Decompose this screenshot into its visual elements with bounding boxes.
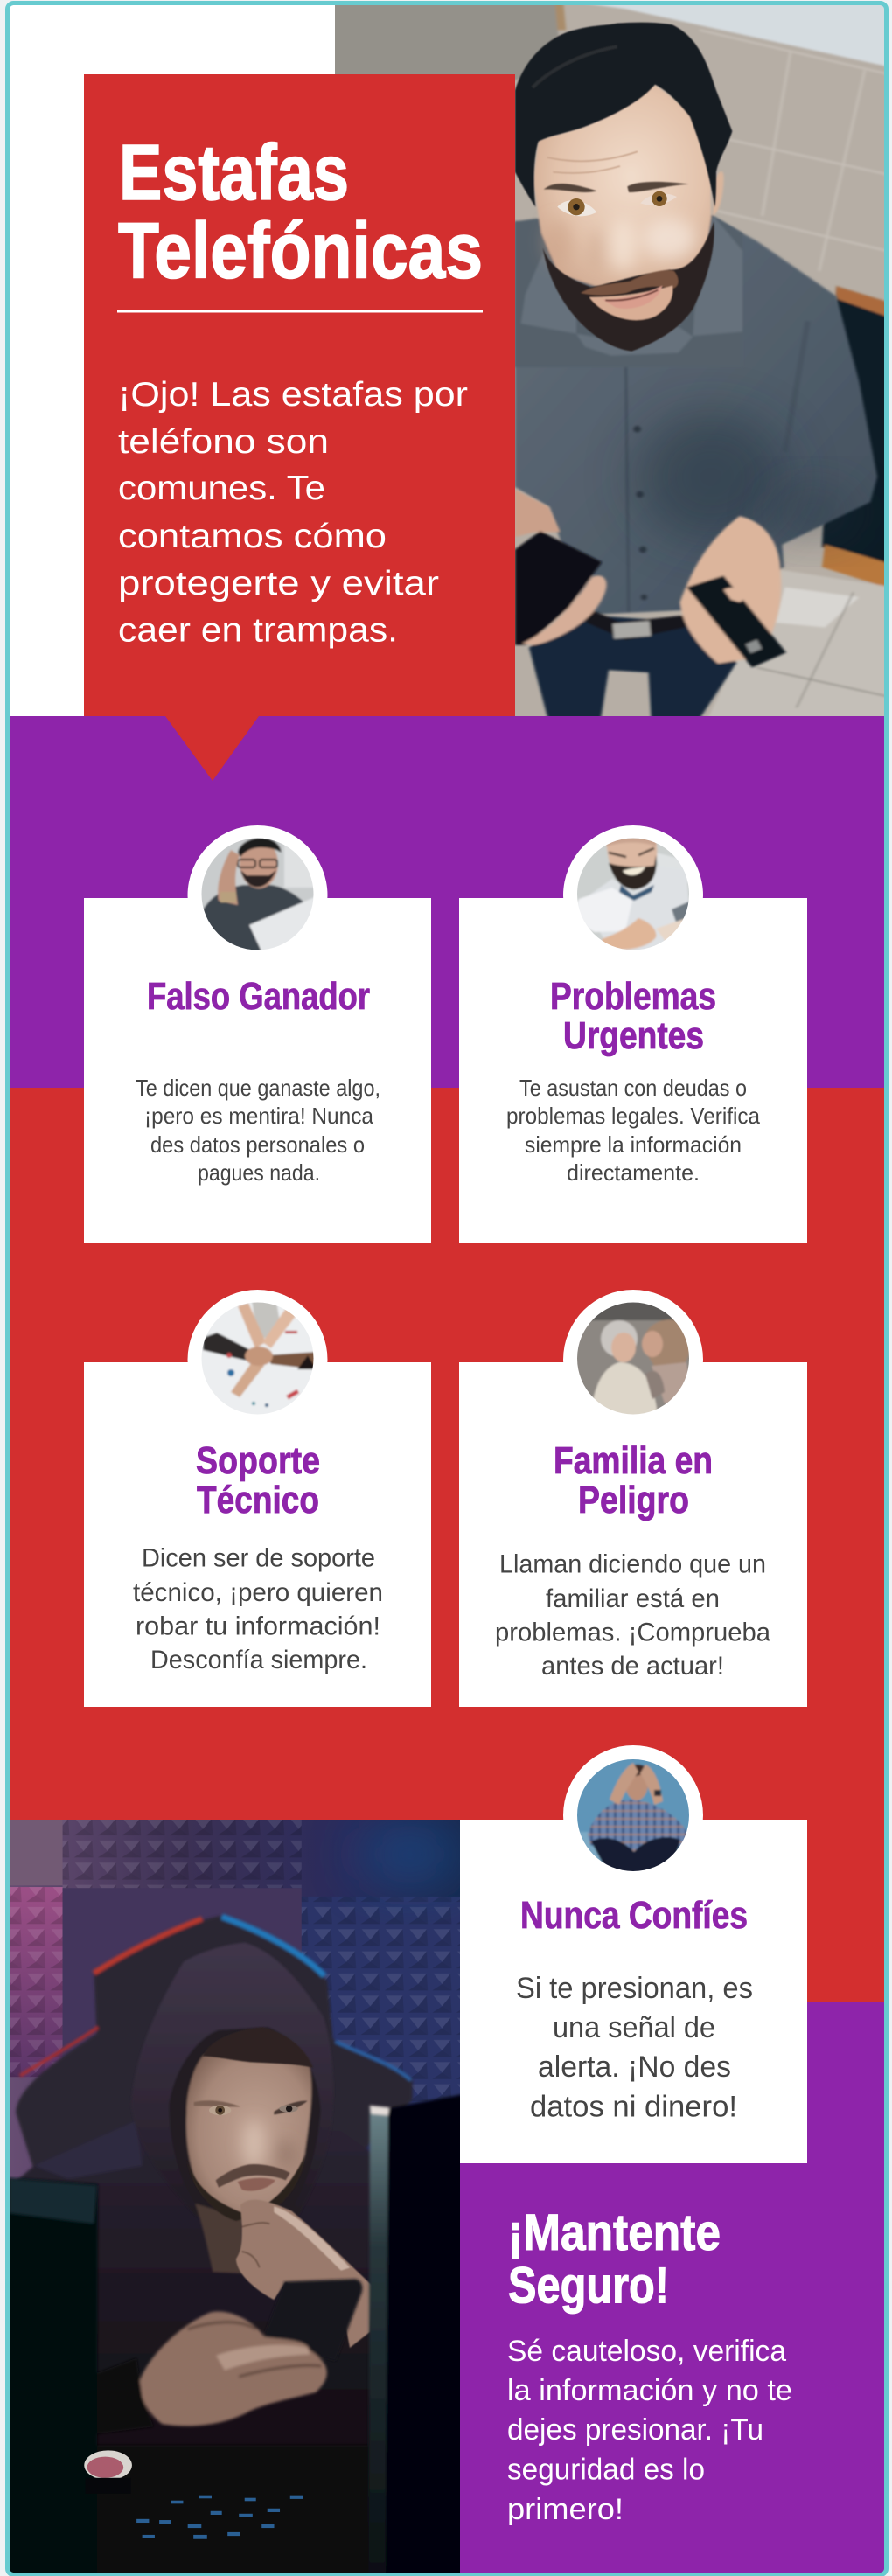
hood, face and hand [131,1943,372,2348]
card [686,575,786,667]
body text: Te dicen que ganaste algo, [136,1075,380,1101]
body text: problemas. ¡Comprueba [495,1618,770,1647]
body text: robar tu información! [136,1612,380,1640]
panel: closing message [507,2204,792,2526]
photo: worried man holding phone and card [330,0,892,723]
ear [713,171,724,216]
heading: Nunca Confíes [520,1894,748,1937]
card: Problemas Urgentes [459,825,807,1243]
beard [543,221,714,352]
body text: Sé cauteloso, verifica [507,2335,786,2368]
body text: Dicen ser de soporte [142,1544,375,1572]
hair [515,23,732,207]
heading [550,975,716,1057]
body text [495,1549,770,1681]
chin hand [236,2200,372,2348]
body text: primero! [507,2493,624,2526]
body text: alerta. ¡No des [538,2050,731,2084]
card: Soporte Técnico [84,1290,431,1707]
card: Familia en Peligro [459,1290,807,1707]
intro text: teléfono son [118,423,329,461]
body text: una señal de [553,2011,715,2044]
body text: Llaman diciendo que un [499,1549,766,1579]
beard [186,2157,304,2221]
shirt [515,216,877,615]
body text: directamente. [567,1159,700,1186]
body text: dejes presionar. ¡Tu [507,2413,763,2447]
icon: elderly woman and relative [575,1301,693,1419]
body text: familiar está en [546,1584,720,1613]
eyes [557,200,596,216]
body text: problemas legales. Verifica [506,1103,761,1129]
heading: Soporte [196,1439,320,1482]
icon: man reading paper [201,838,313,950]
body text: Desconfía siempre. [150,1646,367,1674]
heading: Peligro [578,1479,689,1521]
belt [586,610,686,640]
heading: Familia en [554,1439,713,1482]
body text [506,1075,761,1186]
panel: title [84,74,515,781]
purple band [10,716,884,1088]
title: Telefónicas [118,208,483,296]
man head [515,23,742,367]
heading [196,1446,320,1514]
face [186,2052,311,2215]
skin [533,85,711,289]
body text: datos ni dinero! [530,2090,737,2123]
heading [554,1439,713,1521]
card: Nunca Confíes [460,1745,807,2163]
card: Falso Ganador [84,825,431,1243]
red title box [84,74,515,716]
body text: pagues nada. [198,1159,320,1186]
intro text: contamos cómo [118,518,387,555]
heading: Técnico [197,1479,319,1521]
heading: Falso Ganador [147,975,370,1018]
title: Estafas [119,129,349,217]
body text: Si te presionan, es [516,1972,753,2005]
body text: des datos personales o [150,1131,365,1158]
lower purple band [460,2002,884,2573]
body text: antes de actuar! [541,1652,724,1681]
red band [10,1088,884,2002]
monitors [385,2094,463,2576]
intro text: comunes. Te [118,470,325,507]
body text: siempre la información [525,1131,742,1158]
hair [203,2027,313,2068]
pants [529,615,736,723]
left forearm [515,490,561,537]
brows [544,184,596,192]
phone [515,531,602,645]
heading [508,2204,721,2314]
body text [507,2335,792,2526]
heading: Seguro! [508,2258,669,2314]
intro text: caer en trampas. [118,612,398,649]
body text: técnico, ¡pero quieren [133,1578,383,1607]
body text [133,1544,383,1674]
intro text: protegerte y evitar [118,565,439,602]
body text [136,1075,380,1186]
phone hand [139,2312,327,2426]
heading: ¡Mantente [508,2204,721,2261]
icon: stressed man crumpling paper [575,835,693,953]
hood [131,1943,333,2232]
keyboard [136,2496,303,2539]
eyes [209,2106,231,2115]
phone [261,2279,362,2361]
chair [16,1915,413,2171]
left fingers [522,575,606,645]
heading: Problemas [550,975,716,1018]
icon: joined hands [199,1301,317,1419]
pointer arrow [165,716,259,781]
icon: distressed man sitting [575,1758,693,1876]
body text: la información y no te [507,2374,792,2407]
neck [195,2204,242,2273]
heading: Urgentes [563,1014,704,1057]
brows [194,2100,240,2106]
body text: ¡pero es mentira! Nunca [144,1103,374,1129]
intro text: ¡Ojo! Las estafas por [118,376,468,414]
body text: Te asustan con deudas o [519,1075,747,1101]
can [84,2450,132,2480]
collars [515,216,742,367]
lower dark area [94,2445,373,2576]
right hand [679,516,781,664]
photo: hooded scammer with phone [0,1817,463,2576]
intro text [118,376,468,649]
body [10,2120,387,2576]
forehead lines [547,151,638,173]
title [118,142,481,280]
body text: seguridad es lo [507,2454,705,2487]
body text [516,1972,753,2123]
